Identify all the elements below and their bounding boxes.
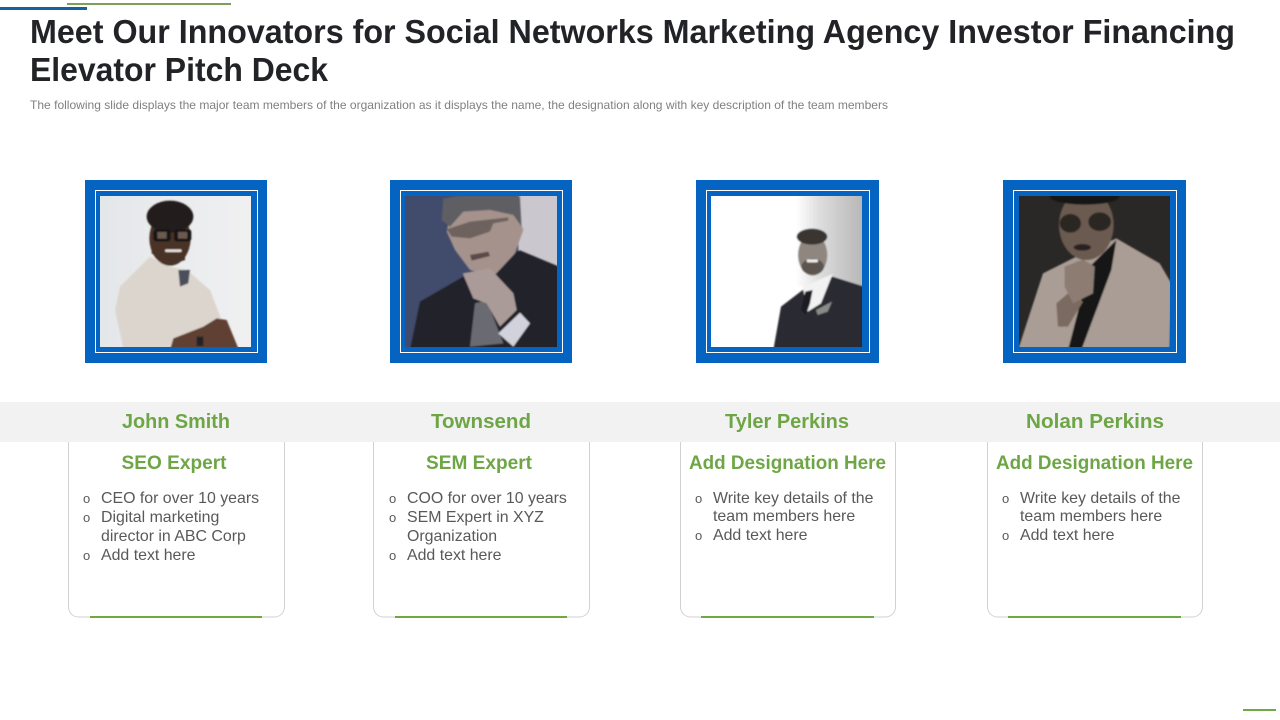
bullet list: John Smith: Digital marketing <box>101 509 219 526</box>
photo frame: Nolan Perkins <box>1003 180 1186 363</box>
panel: Townsend <box>374 180 590 618</box>
title <box>30 13 1235 88</box>
bullet list: Nolan Perkins <box>1002 490 1181 544</box>
panel: John Smith <box>68 180 284 618</box>
bullet list: Tyler Perkins: o <box>695 491 702 506</box>
bullet list: Tyler Perkins <box>695 490 874 544</box>
bullet list: John Smith: o <box>83 491 90 506</box>
card accent line <box>701 616 874 618</box>
bullet list: Townsend: COO for over 10 years <box>407 490 567 507</box>
bullet list: Townsend: o <box>389 548 396 563</box>
bullet list: Nolan Perkins: Add text here <box>1020 527 1115 544</box>
bullet list: John Smith: CEO for over 10 years <box>101 490 259 507</box>
name: Nolan Perkins: Nolan Perkins <box>1026 411 1164 433</box>
title: Meet Our Innovators for Social Networks Marketing Agency Investor Financing <box>30 13 1235 50</box>
card: John Smith <box>68 442 284 617</box>
bullet list: Tyler Perkins: o <box>695 528 702 543</box>
bullet list: John Smith: o <box>83 548 90 563</box>
card accent line <box>90 616 262 618</box>
card accent line <box>1008 616 1181 618</box>
bullet list: Townsend: SEM Expert in XYZ <box>407 509 544 526</box>
bullet list: Tyler Perkins: Write key details of the <box>713 490 874 507</box>
bullet list: John Smith: director in ABC Corp <box>101 528 246 545</box>
name band <box>0 402 1280 442</box>
title: Elevator Pitch Deck <box>30 51 329 88</box>
name: John Smith: John Smith <box>122 411 230 433</box>
photo frame: Townsend <box>390 180 572 363</box>
bullet list: Townsend <box>389 490 567 564</box>
designation: Add Designation Here: Add Designation Here <box>689 453 886 474</box>
bullet list: Tyler Perkins: team members here <box>713 508 855 525</box>
name: Townsend: Townsend <box>431 411 531 433</box>
designation: SEO Expert: SEO Expert <box>122 453 227 474</box>
bullet list: Townsend: o <box>389 510 396 525</box>
top accent: green line <box>67 3 231 5</box>
bullet list: Tyler Perkins: Add text here <box>713 527 808 544</box>
bullet list: John Smith: Add text here <box>101 547 196 564</box>
bullet list: John Smith <box>83 490 259 564</box>
bullet list: Townsend: Organization <box>407 528 497 545</box>
bullet list: Townsend: o <box>389 491 396 506</box>
top accent: blue line <box>0 7 87 10</box>
bullet list: Nolan Perkins: o <box>1002 528 1009 543</box>
name: Tyler Perkins: Tyler Perkins <box>725 411 849 433</box>
bullet list: Nolan Perkins: team members here <box>1020 508 1162 525</box>
bullet list: Nolan Perkins: Write key details of the <box>1020 490 1181 507</box>
card: Townsend <box>374 442 590 617</box>
photo frame: Tyler Perkins <box>696 180 879 363</box>
card: Tyler Perkins <box>680 442 896 617</box>
panel: Nolan Perkins <box>988 180 1202 618</box>
bottom-right accent line <box>1243 709 1276 711</box>
bullet list: Nolan Perkins: o <box>1002 491 1009 506</box>
subtitle: The following slide displays the major team members of the organization as it displays the name, the designation along with key description of the team members <box>30 98 888 112</box>
designation: SEM Expert: SEM Expert <box>426 453 533 474</box>
bullet list: Townsend: Add text here <box>407 547 502 564</box>
card: Nolan Perkins <box>988 442 1202 617</box>
bullet list: John Smith: o <box>83 510 90 525</box>
panel: Tyler Perkins <box>680 180 896 618</box>
card accent line <box>395 616 567 618</box>
designation: Add Designation Here: Add Designation Here <box>996 453 1193 474</box>
photo frame: John Smith <box>85 180 267 363</box>
